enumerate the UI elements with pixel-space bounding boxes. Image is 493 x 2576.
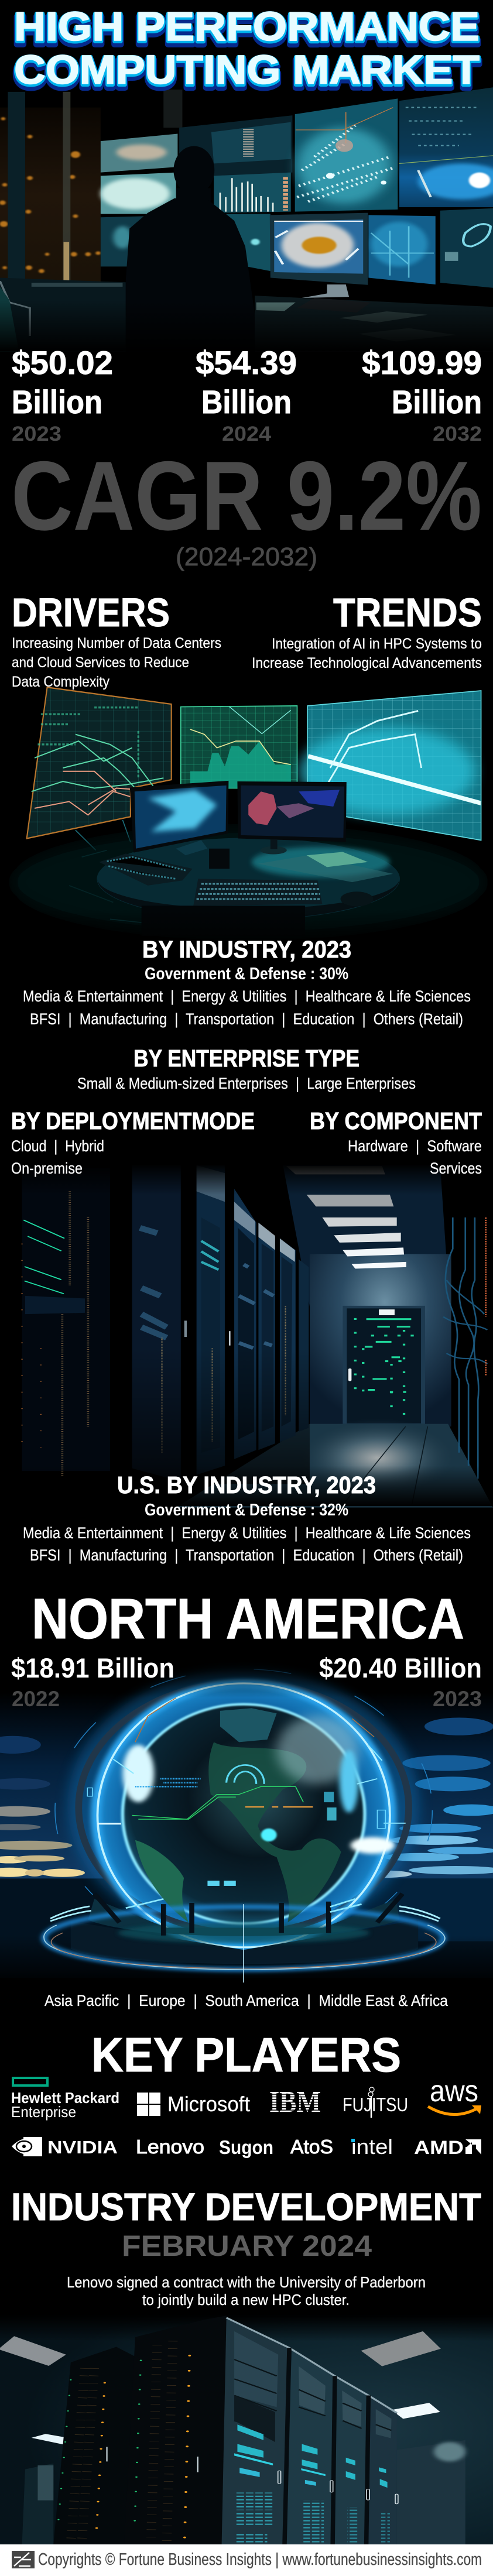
by enterprise type: BY ENTERPRISE TYPE: [133, 1045, 360, 1072]
title: HIGH PERFORMANCE: [14, 4, 480, 49]
rack lower shadow: [131, 1348, 310, 1484]
ceiling lights: [286, 1166, 385, 1174]
globe: [122, 1704, 365, 1924]
door handles: [278, 2471, 281, 2484]
stat 2032: $109.99: [362, 344, 482, 381]
far left rack: [22, 2464, 53, 2544]
left monitors: [101, 133, 177, 173]
center monitor: [270, 213, 368, 285]
logo: Sugon: Sugon: [219, 2136, 273, 2158]
stat 2024: 2024: [222, 423, 272, 445]
bar chart screen: [214, 173, 291, 213]
left chart screen: [27, 687, 172, 839]
logo: Lenovo: Lenovo: [136, 2136, 204, 2157]
logo: AMD: [414, 2137, 481, 2158]
photo: trading desk with chart screens: [0, 687, 493, 953]
back wall: [310, 1254, 451, 1426]
round table: [97, 838, 400, 920]
door: [343, 1306, 425, 1424]
title: COMPUTING MARKET: [14, 48, 480, 94]
north america 2022: $18.91 Billion: [11, 1652, 174, 1683]
by component: Services: [430, 1160, 482, 1177]
by enterprise type: [77, 1045, 416, 1092]
room glow lines: [69, 820, 142, 922]
base platform: [71, 1920, 418, 1964]
keyboards and desk items: [99, 853, 193, 886]
photo: data center corridor: [0, 1164, 493, 1508]
by enterprise type: Small & Medium-sized Enterprises | Large Enterprises: [77, 1075, 416, 1092]
rack top edges: [227, 2318, 397, 2413]
icon: Fortune Business Insights logo: [12, 2551, 35, 2568]
industry development: to jointly build a new HPC cluster.: [142, 2291, 350, 2309]
rack window glass: [201, 1217, 220, 1453]
logo: Microsoft: Microsoft: [167, 2092, 250, 2116]
desk: [0, 278, 126, 351]
right cable bundle: [443, 1217, 487, 1479]
logo: Fujitsu: FUJITSU: [343, 2094, 408, 2115]
continents: [135, 1840, 189, 1922]
stat 2023: Billion: [12, 383, 102, 420]
right chart screen: [307, 691, 481, 840]
table pedestal: [142, 905, 305, 936]
by deployment mode: BY DEPLOYMENTMODE: [11, 1107, 255, 1134]
clouds right: [355, 1717, 493, 1878]
industry development: [11, 2185, 481, 2309]
center chart screen: [181, 706, 297, 788]
floor: [176, 1424, 493, 1508]
left monitor: [130, 781, 228, 853]
photo top fade: [0, 1659, 493, 1698]
photo: analyst in front of monitor wall: [0, 87, 493, 351]
photo fades: [0, 1466, 493, 1506]
key players heading: KEY PLAYERS: [91, 2028, 401, 2082]
stat 2024: Billion: [201, 383, 292, 420]
by industry 2023: [23, 936, 471, 1028]
trends: [252, 590, 482, 671]
photo bottom fade: [0, 300, 493, 351]
big data screen: [295, 98, 398, 212]
stat 2023: $50.02: [12, 344, 113, 381]
right monitor: [237, 781, 347, 842]
north america 2022: 2022: [12, 1687, 60, 1711]
north america 2023: [319, 1652, 482, 1711]
by deployment mode: On-premise: [11, 1160, 83, 1177]
title: COMPUTING MARKET: [14, 47, 480, 92]
U.S. by industry 2023: [23, 1471, 471, 1564]
logo: NVIDIA: [12, 2137, 118, 2157]
by industry 2023: Government & Defense : 30%: [145, 965, 348, 983]
ceiling: [283, 1165, 450, 1306]
right screen: [399, 87, 493, 207]
footer: [0, 2544, 493, 2576]
middle monitor top: [179, 115, 292, 179]
logo: AMD: AMD: [414, 2137, 464, 2158]
logo: NVIDIA: NVIDIA: [47, 2137, 118, 2157]
glow halo: [67, 1669, 420, 1941]
north america 2023: 2023: [433, 1687, 482, 1711]
U.S. by industry 2023: Government & Defense : 32%: [145, 1501, 348, 1519]
back wall panel: [397, 2440, 465, 2544]
logo: Fujitsu: [343, 2087, 408, 2118]
logo: IBM: IBM: [269, 2086, 321, 2119]
server racks: [132, 1165, 309, 1481]
stat 2023: [12, 344, 113, 445]
title: HIGH PERFORMANCE: [14, 5, 480, 50]
dark racks: [53, 2347, 135, 2544]
stat 2023: 2023: [12, 423, 61, 445]
title: COMPUTING MARKET: [14, 51, 480, 97]
by deployment mode: Cloud | Hybrid: [11, 1137, 104, 1155]
logo: intel: intel: [351, 2135, 393, 2159]
CAGR: (2024-2032): [176, 543, 317, 571]
north america 2022: [11, 1652, 174, 1711]
north america: [11, 1587, 482, 1711]
cyan server lights: [237, 2424, 263, 2440]
outer rings: [55, 1669, 432, 1951]
north america 2023: $20.40 Billion: [319, 1652, 482, 1683]
rack detail: [201, 1241, 218, 1270]
logo: aws: aws: [430, 2074, 478, 2108]
clouds left: [0, 1736, 85, 1877]
circuit lines: [132, 1765, 313, 1819]
lit racks: [222, 2318, 289, 2544]
industry development: FEBRUARY 2024: [122, 2229, 372, 2262]
by component: [310, 1107, 482, 1177]
market size stats: [12, 344, 482, 445]
logo: Hewlett Packard Enterprise: Hewlett Packard: [11, 2089, 119, 2107]
stat 2024: [196, 344, 297, 445]
window pillars: [8, 92, 25, 284]
stat 2032: 2032: [433, 423, 482, 445]
drivers: Increasing Number of Data Centers: [12, 635, 221, 651]
by deployment mode: [11, 1107, 255, 1177]
vent arrays: [236, 2492, 273, 2510]
ring cavity: [96, 1683, 392, 1947]
rack glass: [234, 2331, 278, 2407]
rack top highlights: [197, 1165, 225, 1202]
drivers: DRIVERS: [12, 590, 170, 635]
city window: [0, 108, 101, 282]
dark rack dots: [96, 2383, 105, 2541]
logo: Hewlett Packard Enterprise: Enterprise: [11, 2103, 76, 2121]
man silhouette: [126, 146, 255, 351]
logo: Atos: AtoS: [290, 2136, 333, 2157]
drivers: and Cloud Services to Reduce: [12, 654, 189, 671]
title: HIGH PERFORMANCE: [14, 8, 480, 53]
photo: server racks: [0, 2316, 493, 2544]
lower screens: [217, 214, 271, 271]
left dark rack: [22, 1168, 110, 1471]
industry development: Lenovo signed a contract with the University of Paderborn: [67, 2273, 426, 2291]
other regions: Asia Pacific | Europe | South America | Middle East & Africa: [44, 1992, 449, 2009]
stat 2032: [362, 344, 482, 445]
stat 2024: $54.39: [196, 344, 297, 381]
U.S. by industry 2023: U.S. BY INDUSTRY, 2023: [117, 1471, 376, 1498]
stat 2032: Billion: [392, 383, 482, 420]
drivers: [12, 590, 221, 690]
photo bottom fade: [0, 909, 493, 953]
ceiling lights: [0, 2336, 66, 2366]
title: [14, 4, 480, 97]
drivers: Data Complexity: [12, 674, 109, 690]
by industry 2023: BY INDUSTRY, 2023: [142, 936, 351, 963]
logo: Hewlett Packard Enterprise: [11, 2078, 119, 2121]
sky: [0, 1693, 493, 1878]
photo: glowing globe: [0, 1659, 493, 1985]
ground: [0, 1878, 493, 1978]
chair: [0, 281, 30, 336]
ring bright spots: [351, 1837, 395, 1854]
